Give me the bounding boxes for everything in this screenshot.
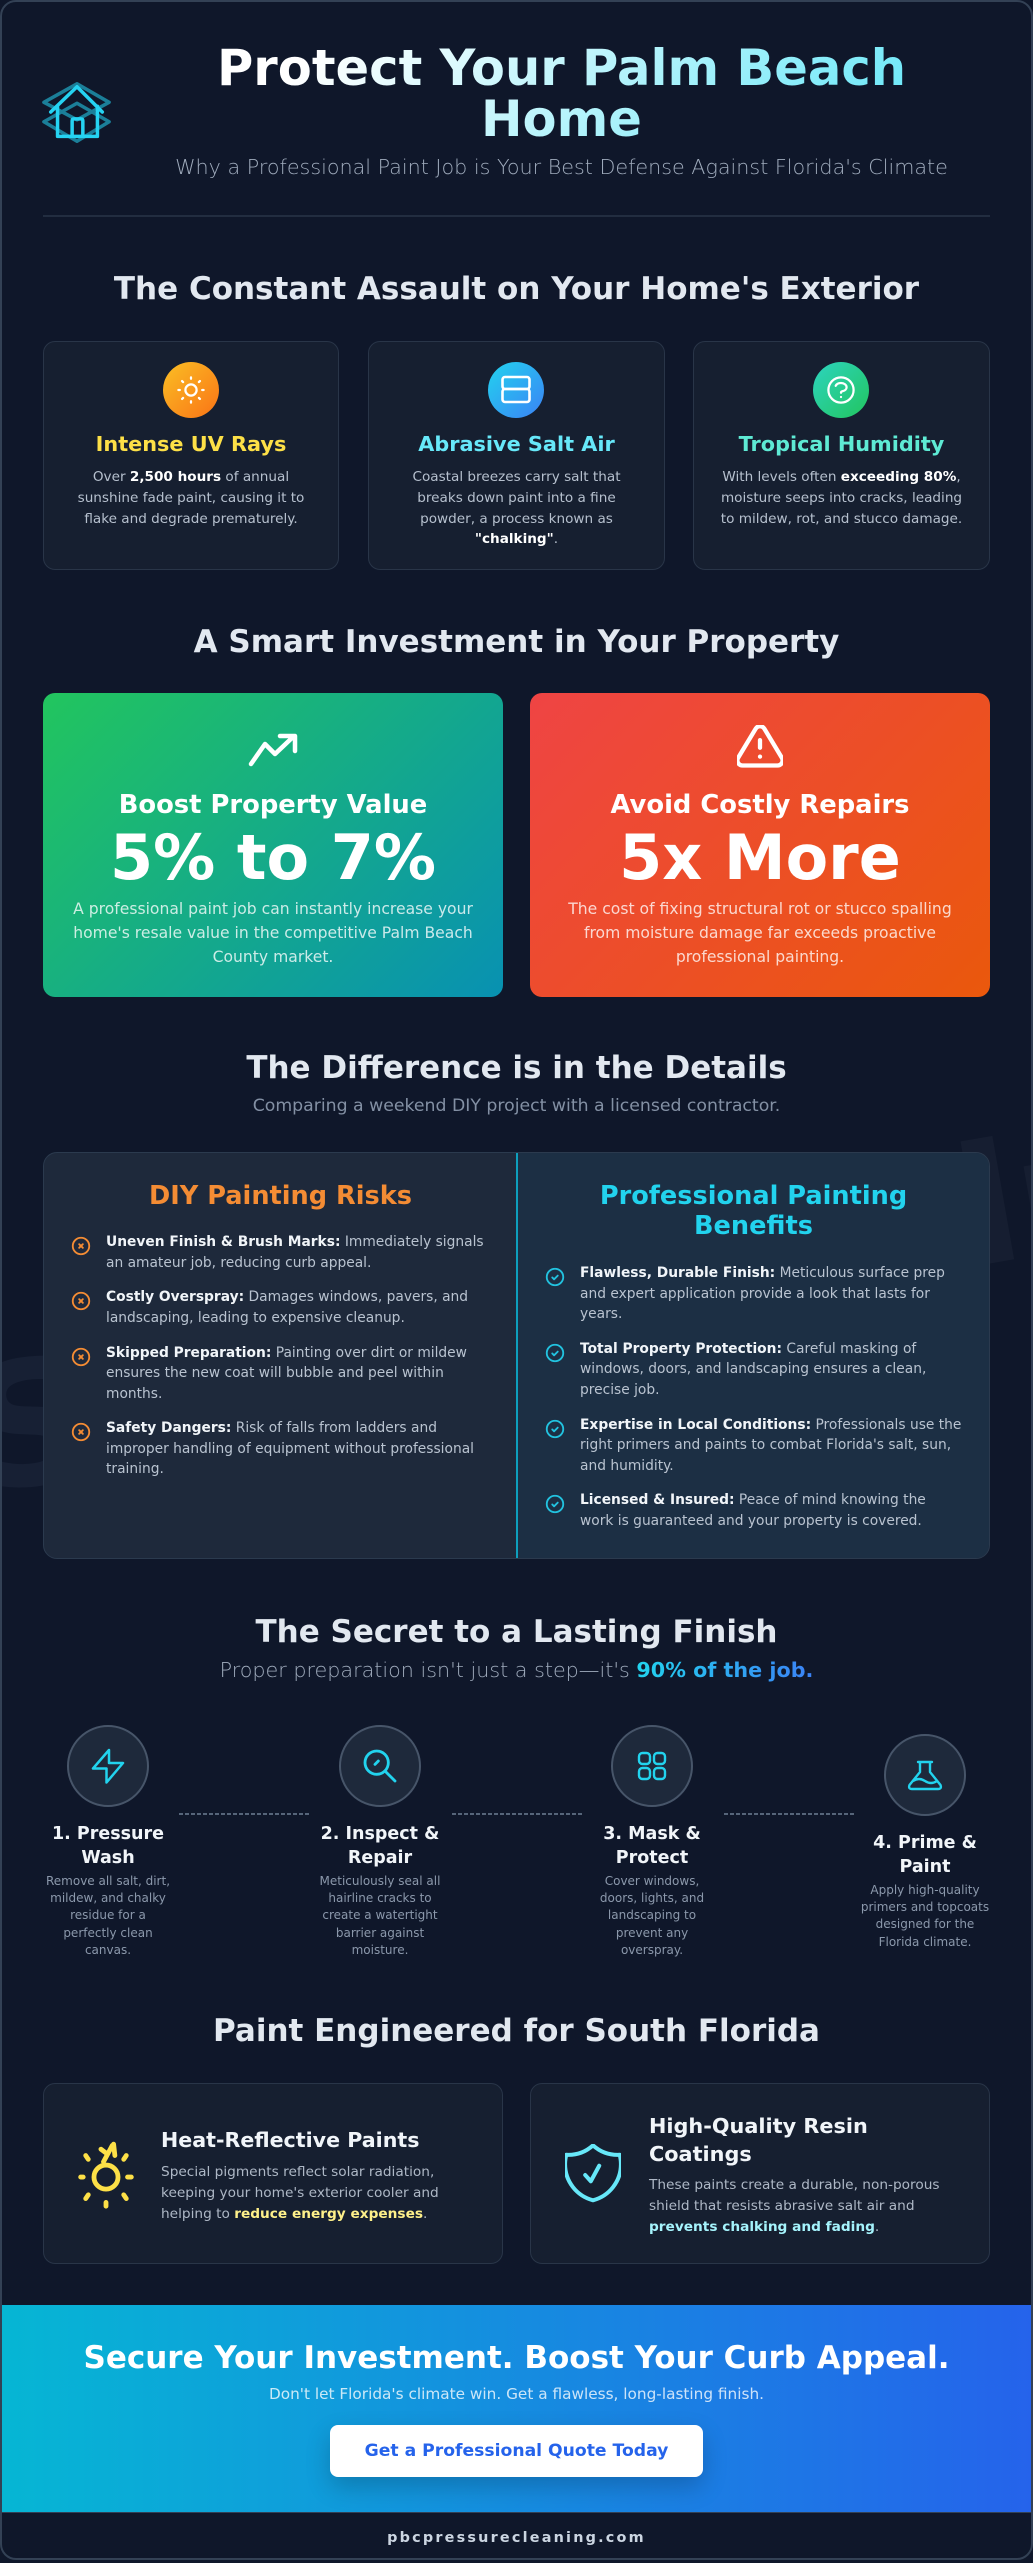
feature text (161, 2164, 439, 2222)
icon: bolt (67, 1725, 149, 1807)
step text: create a watertight (322, 1908, 438, 1922)
step title (52, 1824, 164, 1868)
step title: Paint (900, 1857, 950, 1877)
cta button: Get a Professional Quote Today (365, 2441, 668, 2461)
card text: "chalking". (475, 531, 558, 547)
stat text: professional painting. (676, 948, 844, 966)
benefit 3: and humidity. (580, 1458, 674, 1474)
feature text (648, 2177, 940, 2235)
icon: warning (737, 725, 783, 768)
column title: DIY Painting Risks (149, 1181, 412, 1211)
step text: mildew, and chalky (50, 1891, 166, 1905)
card text: Over 2,500 hours of annual (93, 469, 289, 485)
feature title: Coatings (649, 2142, 752, 2166)
benefit 1: and expert application provide a look that lasts for (580, 1286, 930, 1302)
cta heading: Secure Your Investment. Boost Your Curb Appeal. (84, 2340, 950, 2376)
benefit 2 (546, 1341, 926, 1398)
step text: prevent any (616, 1926, 688, 1940)
feature text: shield that resists abrasive salt air and (649, 2198, 915, 2214)
step title: Wash (81, 1848, 135, 1868)
step text: landscaping to (608, 1908, 696, 1922)
step title (873, 1833, 977, 1877)
icon: grid (611, 1725, 693, 1807)
icon: question circle (813, 362, 869, 418)
stat text: The cost of fixing structural rot or stucco spalling (568, 900, 952, 918)
risk 4: training. (106, 1461, 164, 1477)
subheading: difference: Comparing a weekend DIY project with a licensed contractor. (253, 1096, 780, 1116)
card text: flake and degrade prematurely. (84, 511, 298, 527)
card title: Tropical Humidity (739, 432, 944, 456)
heading: paint engineered: Paint Engineered for South Florida (213, 2013, 820, 2049)
feature text: prevents chalking and fading. (649, 2219, 879, 2235)
stat text: home's resale value in the competitive Palm Beach (73, 924, 473, 942)
title (130, 43, 993, 145)
risk 1 (72, 1234, 484, 1271)
step title: Repair (348, 1848, 412, 1868)
step text: primers and topcoats (861, 1900, 989, 1914)
panel: comparison (43, 1152, 990, 1559)
step text (861, 1883, 989, 1949)
step title (603, 1824, 701, 1868)
benefit 3 (546, 1416, 961, 1474)
panel: heat reflective paints (43, 2083, 503, 2264)
stat number: 5% to 7% (110, 821, 436, 894)
card text: breaks down paint into a fine (417, 490, 616, 506)
step 4 (861, 1734, 989, 1949)
step text: Meticulously seal all (320, 1874, 440, 1888)
heading: constant assault: The Constant Assault on Your Home's Exterior (114, 271, 919, 307)
card text: Coastal breezes carry salt that (412, 469, 621, 485)
step text: perfectly clean (63, 1926, 153, 1940)
step text: Cover windows, (605, 1874, 699, 1888)
heading: lasting finish: The Secret to a Lasting Finish (256, 1614, 777, 1650)
stat text (568, 900, 952, 966)
heading: smart investment: A Smart Investment in Your Property (194, 624, 839, 660)
stat text: County market. (213, 948, 333, 966)
column: professional benefits (516, 1153, 989, 1558)
card text: to mildew, rot, and stucco damage. (721, 511, 962, 527)
step text: canvas. (85, 1943, 131, 1957)
icon: magnifier (339, 1725, 421, 1807)
feature text: helping to reduce energy expenses. (161, 2206, 427, 2222)
title: Home (481, 90, 642, 148)
step title (321, 1824, 439, 1868)
benefit 4: work is guaranteed and your property is covered. (580, 1513, 922, 1529)
subheading: lasting finish: Proper preparation isn't just a step—it's 90% of the job. (220, 1658, 813, 1682)
card text (412, 469, 621, 547)
step title: 3. Mask & (603, 1824, 701, 1844)
connector arrow 3 (724, 1813, 854, 1815)
step title: 1. Pressure (52, 1824, 164, 1844)
column title: Benefits (694, 1211, 813, 1241)
step 2 (320, 1725, 440, 1957)
risk 3: Skipped Preparation: Painting over dirt or mildew (106, 1344, 467, 1360)
footer (2, 2512, 1031, 2558)
step title: 4. Prime & (873, 1833, 977, 1853)
icon: trending up (248, 734, 298, 766)
cta text: Don't let Florida's climate win. Get a flawless, long-lasting finish. (269, 2385, 764, 2403)
risk 4: improper handling of equipment without professional (106, 1441, 474, 1457)
risk 2: Costly Overspray: Damages windows, pavers, and (106, 1289, 468, 1305)
benefit 3: right primers and paints to combat Florida's salt, sun, (580, 1437, 951, 1453)
step text: doors, lights, and (600, 1891, 704, 1905)
step title: 2. Inspect & (321, 1824, 439, 1844)
risk 4 (72, 1420, 474, 1477)
heading: difference: The Difference is in the Details (246, 1050, 787, 1086)
feature title: High-Quality Resin (649, 2114, 868, 2138)
step text: designed for the (876, 1917, 974, 1931)
card text: sunshine fade paint, causing it to (78, 490, 304, 506)
connector arrow 2 (452, 1813, 582, 1815)
panel: avoid costly repairs (530, 693, 990, 997)
connector arrow 1 (179, 1813, 309, 1815)
card title: Intense UV Rays (96, 432, 286, 456)
footer: pbcpressurecleaning.com (387, 2530, 646, 2546)
icon: flask (884, 1734, 966, 1816)
benefit 4: Licensed & Insured: Peace of mind knowing the (580, 1492, 926, 1508)
icon: sun (163, 362, 219, 418)
benefit 2: precise job. (580, 1382, 660, 1398)
call to action banner (2, 2305, 1031, 2512)
step text (600, 1874, 704, 1957)
panel: boost property value (43, 693, 503, 997)
header logo icon (42, 82, 111, 143)
risk 3: ensures the new coat will bubble and peel within (106, 1365, 444, 1381)
step 3 (600, 1725, 704, 1957)
risk 4: Safety Dangers: Risk of falls from ladders and (106, 1420, 437, 1436)
icon: salt layers (488, 362, 544, 418)
column title: Professional Painting (600, 1180, 907, 1210)
panel: humidity (693, 341, 990, 570)
step text (46, 1874, 170, 1957)
risk 3 (72, 1344, 467, 1402)
stat title: Avoid Costly Repairs (610, 790, 910, 820)
benefit 1: years. (580, 1306, 622, 1322)
column: DIY risks (72, 1181, 484, 1477)
risk 1: an amateur job, reducing curb appeal. (106, 1255, 371, 1271)
icon: shield check (565, 2144, 621, 2202)
step 1 (46, 1725, 170, 1957)
step text: Remove all salt, dirt, (46, 1874, 170, 1888)
risk 2: landscaping, leading to expensive cleanup. (106, 1310, 405, 1326)
feature text: Special pigments reflect solar radiation, (161, 2164, 434, 2180)
card title: Abrasive Salt Air (418, 432, 615, 456)
subtitle: Why a Professional Paint Job is Your Best Defense Against Florida's Climate (175, 155, 948, 179)
card text: powder, a process known as (420, 511, 613, 527)
risk 1: Uneven Finish & Brush Marks: Immediately signals (106, 1234, 484, 1250)
column title (600, 1180, 907, 1241)
panel: salt air (368, 341, 665, 570)
panel: UV rays (43, 341, 339, 570)
risk 3: months. (106, 1386, 162, 1402)
card text (78, 469, 304, 527)
step text: residue for a (70, 1908, 146, 1922)
stat text (73, 900, 473, 966)
benefit 4 (546, 1492, 926, 1529)
feature text: keeping your home's exterior cooler and (161, 2185, 439, 2201)
card text (721, 469, 962, 527)
stat title: Boost Property Value (119, 790, 427, 820)
risk 2 (72, 1289, 468, 1326)
step text: moisture. (352, 1943, 408, 1957)
step text: barrier against (336, 1926, 424, 1940)
feature title (649, 2114, 868, 2166)
step text: Apply high-quality (870, 1883, 980, 1897)
icon: sun (78, 2142, 134, 2209)
stat text: A professional paint job can instantly increase your (73, 900, 473, 918)
step text: hairline cracks to (328, 1891, 432, 1905)
benefit 2: windows, doors, and landscaping ensures a clean, (580, 1361, 926, 1377)
benefit 2: Total Property Protection: Careful masking of (580, 1341, 916, 1357)
card text: With levels often exceeding 80%, (722, 469, 961, 485)
benefit 3: Expertise in Local Conditions: Professionals use the (580, 1416, 961, 1432)
cta button (330, 2425, 703, 2477)
step text (320, 1874, 440, 1957)
benefit 1: Flawless, Durable Finish: Meticulous surface prep (580, 1265, 945, 1281)
benefit 1 (546, 1265, 945, 1322)
card text: moisture seeps into cracks, leading (721, 490, 962, 506)
step text: Florida climate. (879, 1935, 971, 1949)
step text: overspray. (621, 1943, 683, 1957)
feature text: These paints create a durable, non-porous (649, 2177, 940, 2193)
step title: Protect (616, 1848, 688, 1868)
panel: resin coatings (530, 2083, 990, 2264)
feature title: Heat-Reflective Paints (161, 2128, 419, 2152)
stat number: 5x More (619, 821, 901, 894)
title: Protect Your Palm Beach (217, 39, 906, 97)
stat text: from moisture damage far exceeds proactive (584, 924, 936, 942)
